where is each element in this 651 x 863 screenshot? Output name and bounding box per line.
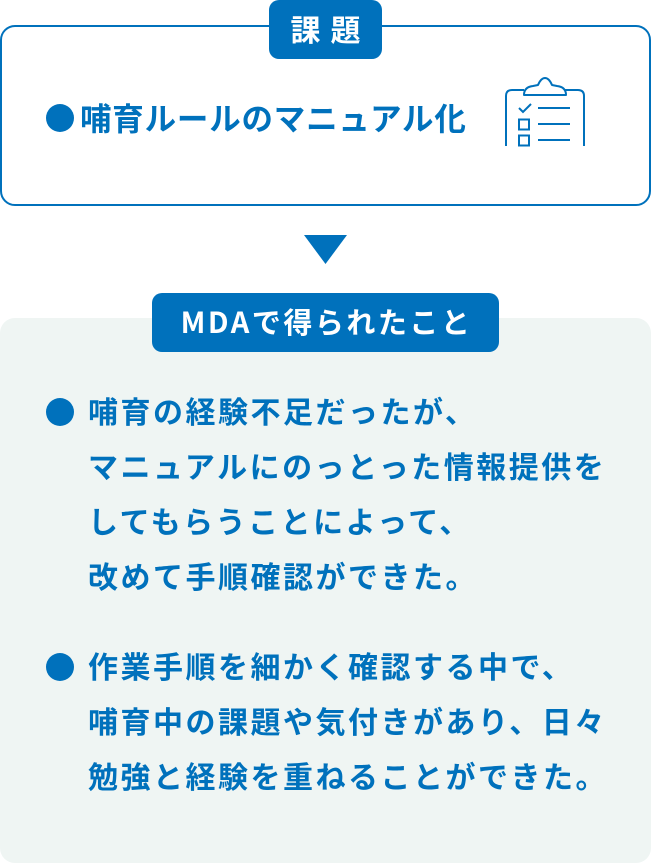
panel: results [0,318,651,863]
result item 2 [46,643,608,797]
heading badge: issue: 課題 [290,6,370,50]
result item 1: してもらうことによって、 [88,498,472,542]
result item 1 [46,388,606,597]
panel: issue box [0,25,651,206]
result item 2: 哺育中の課題や気付きがあり、日々 [88,698,607,742]
heading badge: results: MDAで得られたこと [181,300,472,342]
result item 1: マニュアルにのっとった情報提供を [88,443,606,487]
result item 2: 勉強と経験を重ねることができた。 [88,753,608,797]
heading badge: results [152,293,499,352]
issue bullet text: 哺育ルールのマニュアル化 [80,94,467,140]
result item 2: 作業手順を細かく確認する中で、 [88,643,574,687]
arrow: down triangle [304,235,347,264]
result item 1: 改めて手順確認ができた。 [88,553,478,597]
heading badge: issue [269,0,382,59]
icon: clipboard checklist [505,77,585,146]
result item 1: 哺育の経験不足だったが、 [88,388,477,432]
